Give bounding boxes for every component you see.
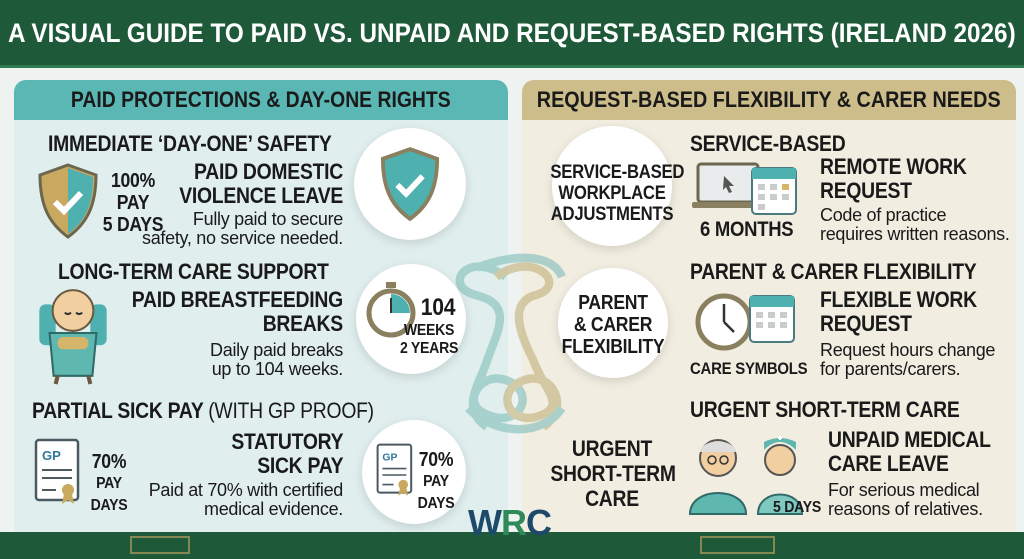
circle: parent & carer flexibility — [558, 268, 668, 378]
icon: GP certificate — [34, 438, 80, 504]
item: paid domestic violence leave: safety, no service needed. — [142, 228, 343, 248]
footer band — [0, 532, 1024, 559]
label: care symbols: CARE SYMBOLS — [690, 359, 807, 378]
panel header: request: REQUEST-BASED FLEXIBILITY & CARER NEEDS — [537, 87, 1001, 112]
item: paid breastfeeding breaks: up to 104 weeks. — [212, 359, 343, 379]
title bar — [0, 0, 1024, 68]
panel: paid protections — [14, 80, 508, 532]
item: paid breastfeeding breaks: Daily paid breaks — [210, 340, 343, 360]
item: remote work request: REMOTE WORK — [820, 154, 967, 179]
icon: laptop and calendar — [692, 162, 797, 215]
item: paid domestic violence leave: VIOLENCE LEAVE — [179, 183, 343, 208]
icon circle: GP 70%: 70% — [419, 449, 453, 471]
stat: 70% pay days: PAY — [96, 475, 122, 492]
item: unpaid medical care leave: For serious medical — [828, 480, 979, 500]
icon circle: GP 70% — [362, 420, 466, 524]
item: unpaid medical care leave: UNPAID MEDICAL — [828, 427, 991, 452]
heading: urgent short-term care: URGENT SHORT-TERM CARE — [690, 397, 960, 422]
item: remote work request: REQUEST — [820, 178, 912, 203]
stat: 100% pay 5 days: 5 DAYS — [103, 214, 163, 236]
logo: WRC: WRC — [468, 502, 551, 543]
panel header: paid: PAID PROTECTIONS & DAY-ONE RIGHTS — [71, 87, 451, 112]
circle: parent & carer flexibility: FLEXIBILITY — [562, 336, 664, 358]
stat: 100% pay 5 days: 100% — [111, 170, 155, 192]
item: unpaid medical care leave — [828, 427, 991, 519]
item: statutory sick pay: STATUTORY — [231, 429, 343, 454]
stat: 70% pay days: 70% — [92, 451, 126, 473]
icon circle: stopwatch 104 weeks: WEEKS — [404, 322, 454, 339]
item: statutory sick pay: medical evidence. — [204, 499, 343, 519]
icon: clock and calendar — [696, 294, 795, 350]
panel: request-based — [522, 80, 1016, 532]
heading: service-based: SERVICE-BASED — [690, 131, 845, 156]
item: paid domestic violence leave: Fully paid to secure — [193, 209, 343, 229]
circle: service-based workplace adjustments: SERVICE-BASED — [550, 162, 684, 183]
icon circle: shield — [354, 128, 466, 240]
item: remote work request: requires written reasons. — [820, 224, 1010, 244]
item: flexible work request: FLEXIBLE WORK — [820, 287, 977, 312]
stat: 5 days: 5 DAYS — [773, 499, 821, 516]
item: unpaid medical care leave: CARE LEAVE — [828, 451, 949, 476]
heading: immediate day-one safety: IMMEDIATE ‘DAY-ONE’ SAFETY — [48, 131, 332, 156]
item: paid breastfeeding breaks: BREAKS — [263, 311, 343, 336]
panel header: request — [502, 80, 1024, 120]
item: paid breastfeeding breaks: PAID BREASTFEEDING — [132, 287, 343, 312]
heading: long-term care support: LONG-TERM CARE SUPPORT — [58, 259, 329, 284]
label: urgent short-term care — [550, 436, 676, 511]
stat: 100% pay 5 days — [103, 170, 163, 236]
icon circle: stopwatch 104 weeks — [356, 264, 466, 374]
item: paid domestic violence leave: PAID DOMESTIC — [194, 159, 343, 184]
item: flexible work request: REQUEST — [820, 311, 912, 336]
item: paid breastfeeding breaks — [132, 287, 343, 379]
item: unpaid medical care leave: reasons of relatives. — [828, 499, 983, 519]
item: statutory sick pay — [149, 429, 344, 519]
item: paid domestic violence leave — [142, 159, 343, 248]
icon: elderly and nurse — [689, 436, 803, 515]
item: statutory sick pay: Paid at 70% with certified — [149, 480, 343, 500]
item: statutory sick pay: SICK PAY — [257, 453, 343, 478]
icon circle: GP 70%: PAY — [423, 473, 449, 490]
label: urgent short-term care: URGENT — [572, 436, 652, 461]
item: remote work request: Code of practice — [820, 205, 946, 225]
celtic knot — [456, 254, 566, 434]
circle: parent & carer flexibility: PARENT — [578, 292, 648, 314]
circle: service-based workplace adjustments: ADJUSTMENTS — [551, 204, 673, 225]
item: flexible work request: for parents/carers. — [820, 359, 960, 379]
stat: 70% pay days — [91, 451, 128, 514]
circle: service-based workplace adjustments: WORKPLACE — [558, 183, 666, 204]
stat: 70% pay days: DAYS — [91, 497, 127, 514]
stat: 6 months: 6 MONTHS — [700, 218, 793, 241]
circle: service-based workplace adjustments — [552, 126, 672, 246]
item: remote work request — [820, 154, 1010, 244]
circle: parent & carer flexibility: & CARER — [574, 314, 652, 336]
icon circle: stopwatch 104 weeks: 2 YEARS — [400, 340, 458, 357]
icon circle: GP 70%: GP — [382, 453, 397, 464]
label: urgent short-term care: SHORT-TERM — [550, 461, 676, 486]
icon: baby carrier — [39, 289, 107, 384]
icon circle: stopwatch 104 weeks: 104 — [421, 294, 455, 321]
item: flexible work request: Request hours change — [820, 340, 995, 360]
title: A VISUAL GUIDE TO PAID VS. UNPAID AND REQUEST-BASED RIGHTS (IRELAND 2026) — [8, 18, 1016, 48]
heading: partial sick pay: PARTIAL SICK PAY (WITH GP PROOF) — [32, 398, 374, 423]
stat: 100% pay 5 days: PAY — [117, 192, 149, 214]
icon: shield split — [38, 163, 98, 239]
icon circle: GP 70%: DAYS — [418, 495, 454, 512]
label: urgent short-term care: CARE — [585, 486, 639, 511]
item: flexible work request — [820, 287, 995, 379]
heading: parent & carer flexibility: PARENT & CARER FLEXIBILITY — [690, 259, 976, 284]
icon: GP certificate: GP — [42, 448, 61, 463]
panel header: paid — [14, 80, 508, 120]
